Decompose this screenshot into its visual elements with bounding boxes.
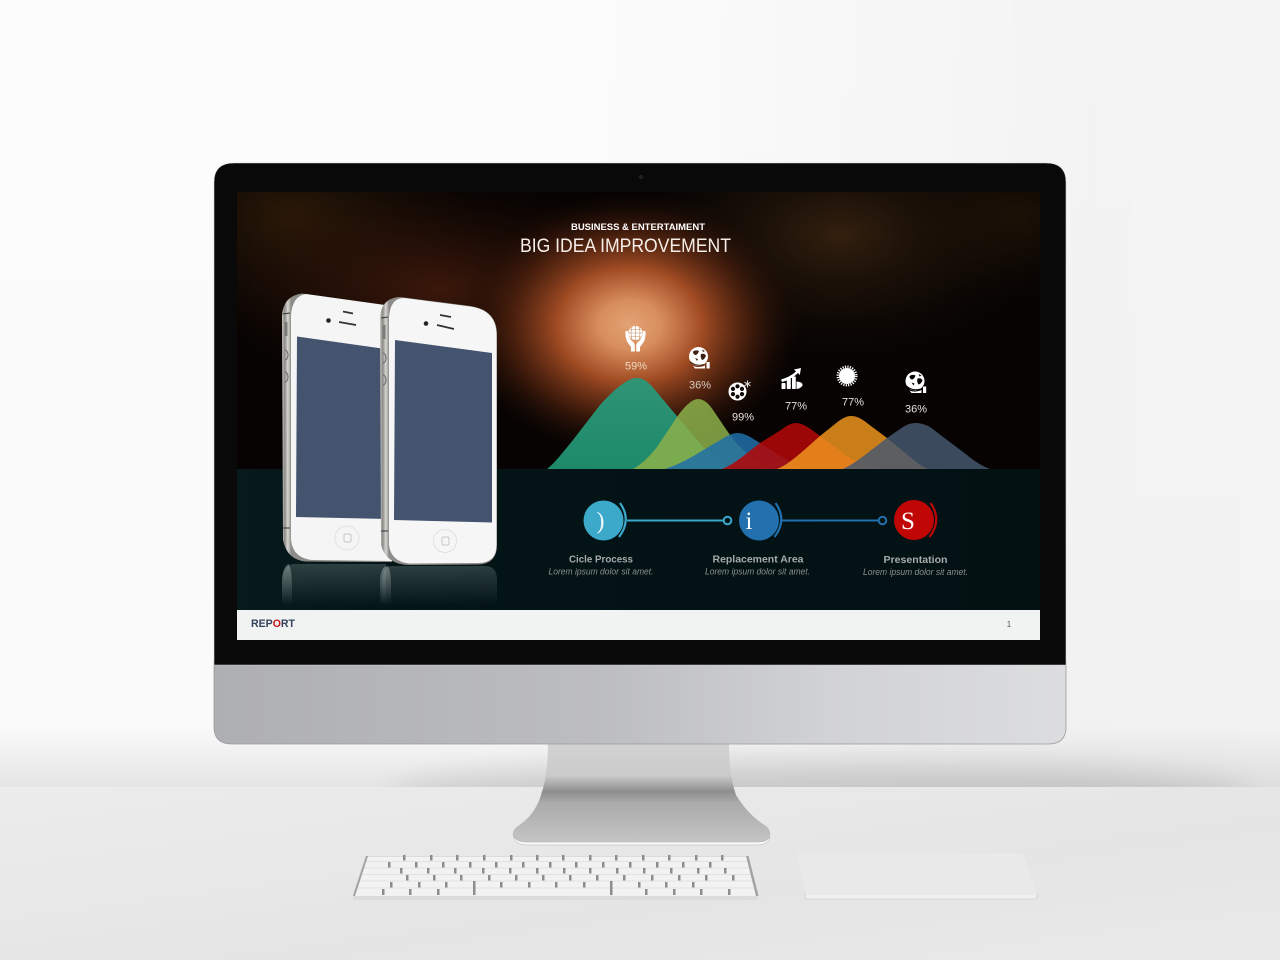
icon: sun [838, 367, 856, 385]
step 3 caption: Presentation [884, 554, 948, 566]
mountain: green 59% [547, 378, 732, 469]
footer bar [237, 610, 1040, 640]
mountain chart [547, 378, 990, 469]
title [520, 222, 731, 257]
key gaps [382, 855, 734, 895]
mountain: orange 77% [777, 416, 928, 469]
percentage labels: 36% [689, 380, 711, 392]
percentage labels: 59% [625, 360, 647, 372]
icon: hands holding globe [625, 326, 646, 352]
step 2 node: i [746, 508, 753, 535]
percentage labels: 77% [842, 396, 864, 408]
step 3 caption: Lorem ipsum dolor sit amet. [863, 567, 968, 577]
page number: 1 [1007, 620, 1012, 629]
step 1 node: ) [596, 508, 604, 534]
desk surface [0, 787, 1280, 960]
phone screen [296, 336, 386, 519]
phone screen [394, 340, 492, 522]
keyboard [353, 855, 758, 900]
trackpad [797, 853, 1037, 899]
wall background [0, 730, 1280, 787]
lower dark panel [237, 469, 1040, 610]
monitor stand [513, 743, 770, 845]
step 2 caption [705, 554, 810, 576]
monitor chin [214, 660, 1066, 744]
process timeline [548, 500, 968, 577]
step 1 node [584, 500, 731, 540]
slide background with blurred glow [237, 192, 1040, 436]
step 2 connector [782, 520, 878, 522]
step 1 connector [627, 520, 723, 522]
percentage labels: 36% [905, 404, 927, 416]
step 3 node [894, 500, 936, 540]
step 2 caption: Replacement Area [712, 554, 804, 566]
icon: globe on hand [906, 372, 926, 393]
title: BIG IDEA IMPROVEMENT [520, 236, 731, 257]
step 3 caption [863, 554, 968, 577]
percentage labels [625, 360, 927, 424]
icon: wheel with snowflake [728, 380, 750, 400]
mountain: slate 36% [843, 423, 990, 469]
icon: bar chart with arrow [781, 368, 803, 389]
step 3 node: S [901, 508, 915, 535]
step 1 caption [548, 554, 654, 576]
monitor bezel [214, 163, 1066, 665]
phone: front [380, 297, 497, 565]
icon: globe on hand [689, 347, 710, 368]
mountain: blue 99% [665, 433, 803, 469]
phone: back [282, 294, 392, 562]
slide screen [237, 192, 1040, 640]
step 2 caption: Lorem ipsum dolor sit amet. [705, 566, 810, 576]
title: BUSINESS & ENTERTAIMENT [571, 222, 706, 232]
mountain: red 77% [722, 423, 880, 469]
percentage labels: 99% [732, 412, 754, 424]
footer brand: REPORT [251, 618, 295, 630]
percentage labels: 77% [785, 400, 807, 412]
step 2 node [739, 500, 886, 540]
mountain: lime 36% [633, 399, 770, 469]
step 1 caption: Lorem ipsum dolor sit amet. [548, 566, 654, 576]
step 1 caption: Cicle Process [569, 554, 633, 566]
camera [639, 175, 643, 179]
phone reflections [282, 564, 497, 605]
